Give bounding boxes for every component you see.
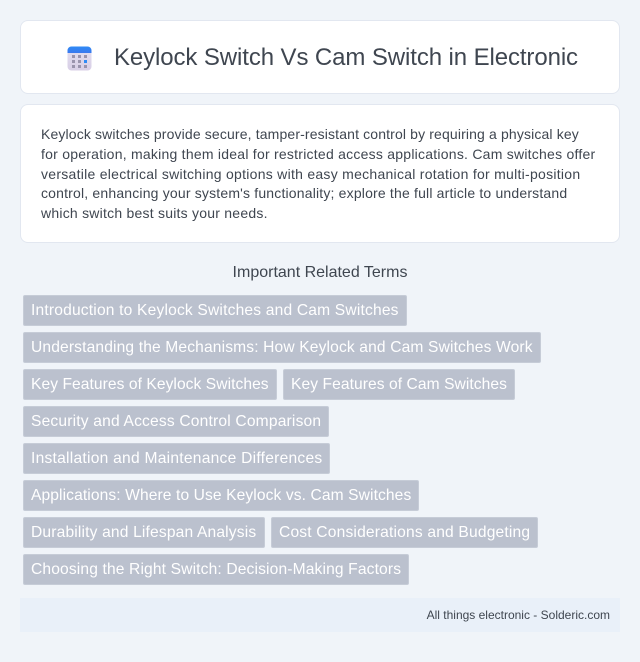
- tag: [23, 480, 419, 511]
- tag: [23, 443, 330, 474]
- text block: summary: Keylock switches provide secure, tamper-resistant control by requiring a physical key: [41, 126, 579, 142]
- tag: Security and Access Control Comparison: [31, 413, 321, 430]
- tag: Durability and Lifespan Analysis: [31, 524, 256, 541]
- text block: summary: for operation, making them ideal for restricted access applications. Cam switches offer: [41, 146, 595, 162]
- tag: Introduction to Keylock Switches and Cam Switches: [31, 302, 399, 319]
- title: Keylock Switch Vs Cam Switch in Electronic: [114, 44, 578, 71]
- tag: [23, 517, 265, 548]
- footer: [20, 598, 620, 632]
- tag: Key Features of Cam Switches: [291, 376, 507, 393]
- tag: [283, 369, 515, 400]
- panel: summary: [20, 104, 620, 243]
- text block: summary: versatile electrical switching options with easy mechanical rotation for multi-position: [41, 166, 580, 182]
- text block: summary: control, enhancing your system's functionality; explore the full article to understand: [41, 185, 567, 201]
- tag: Understanding the Mechanisms: How Keylock and Cam Switches Work: [31, 339, 533, 356]
- tag: Key Features of Keylock Switches: [31, 376, 269, 393]
- tag: Installation and Maintenance Differences: [31, 450, 322, 467]
- panel: header: [20, 20, 620, 94]
- text block: summary: [41, 126, 595, 221]
- tag: [23, 369, 277, 400]
- tag: Choosing the Right Switch: Decision-Making Factors: [31, 561, 401, 578]
- icon: calendar: [68, 46, 92, 70]
- tag: [271, 517, 538, 548]
- tag: Applications: Where to Use Keylock vs. Cam Switches: [31, 487, 411, 504]
- tag: [23, 332, 541, 363]
- footer: All things electronic - Solderic.com: [427, 608, 610, 622]
- heading: related terms: Important Related Terms: [233, 264, 407, 281]
- tag: [23, 295, 407, 326]
- tag: [23, 554, 409, 585]
- text block: summary: which switch best suits your needs.: [41, 205, 268, 221]
- tag: Cost Considerations and Budgeting: [279, 524, 530, 541]
- tag: [23, 406, 329, 437]
